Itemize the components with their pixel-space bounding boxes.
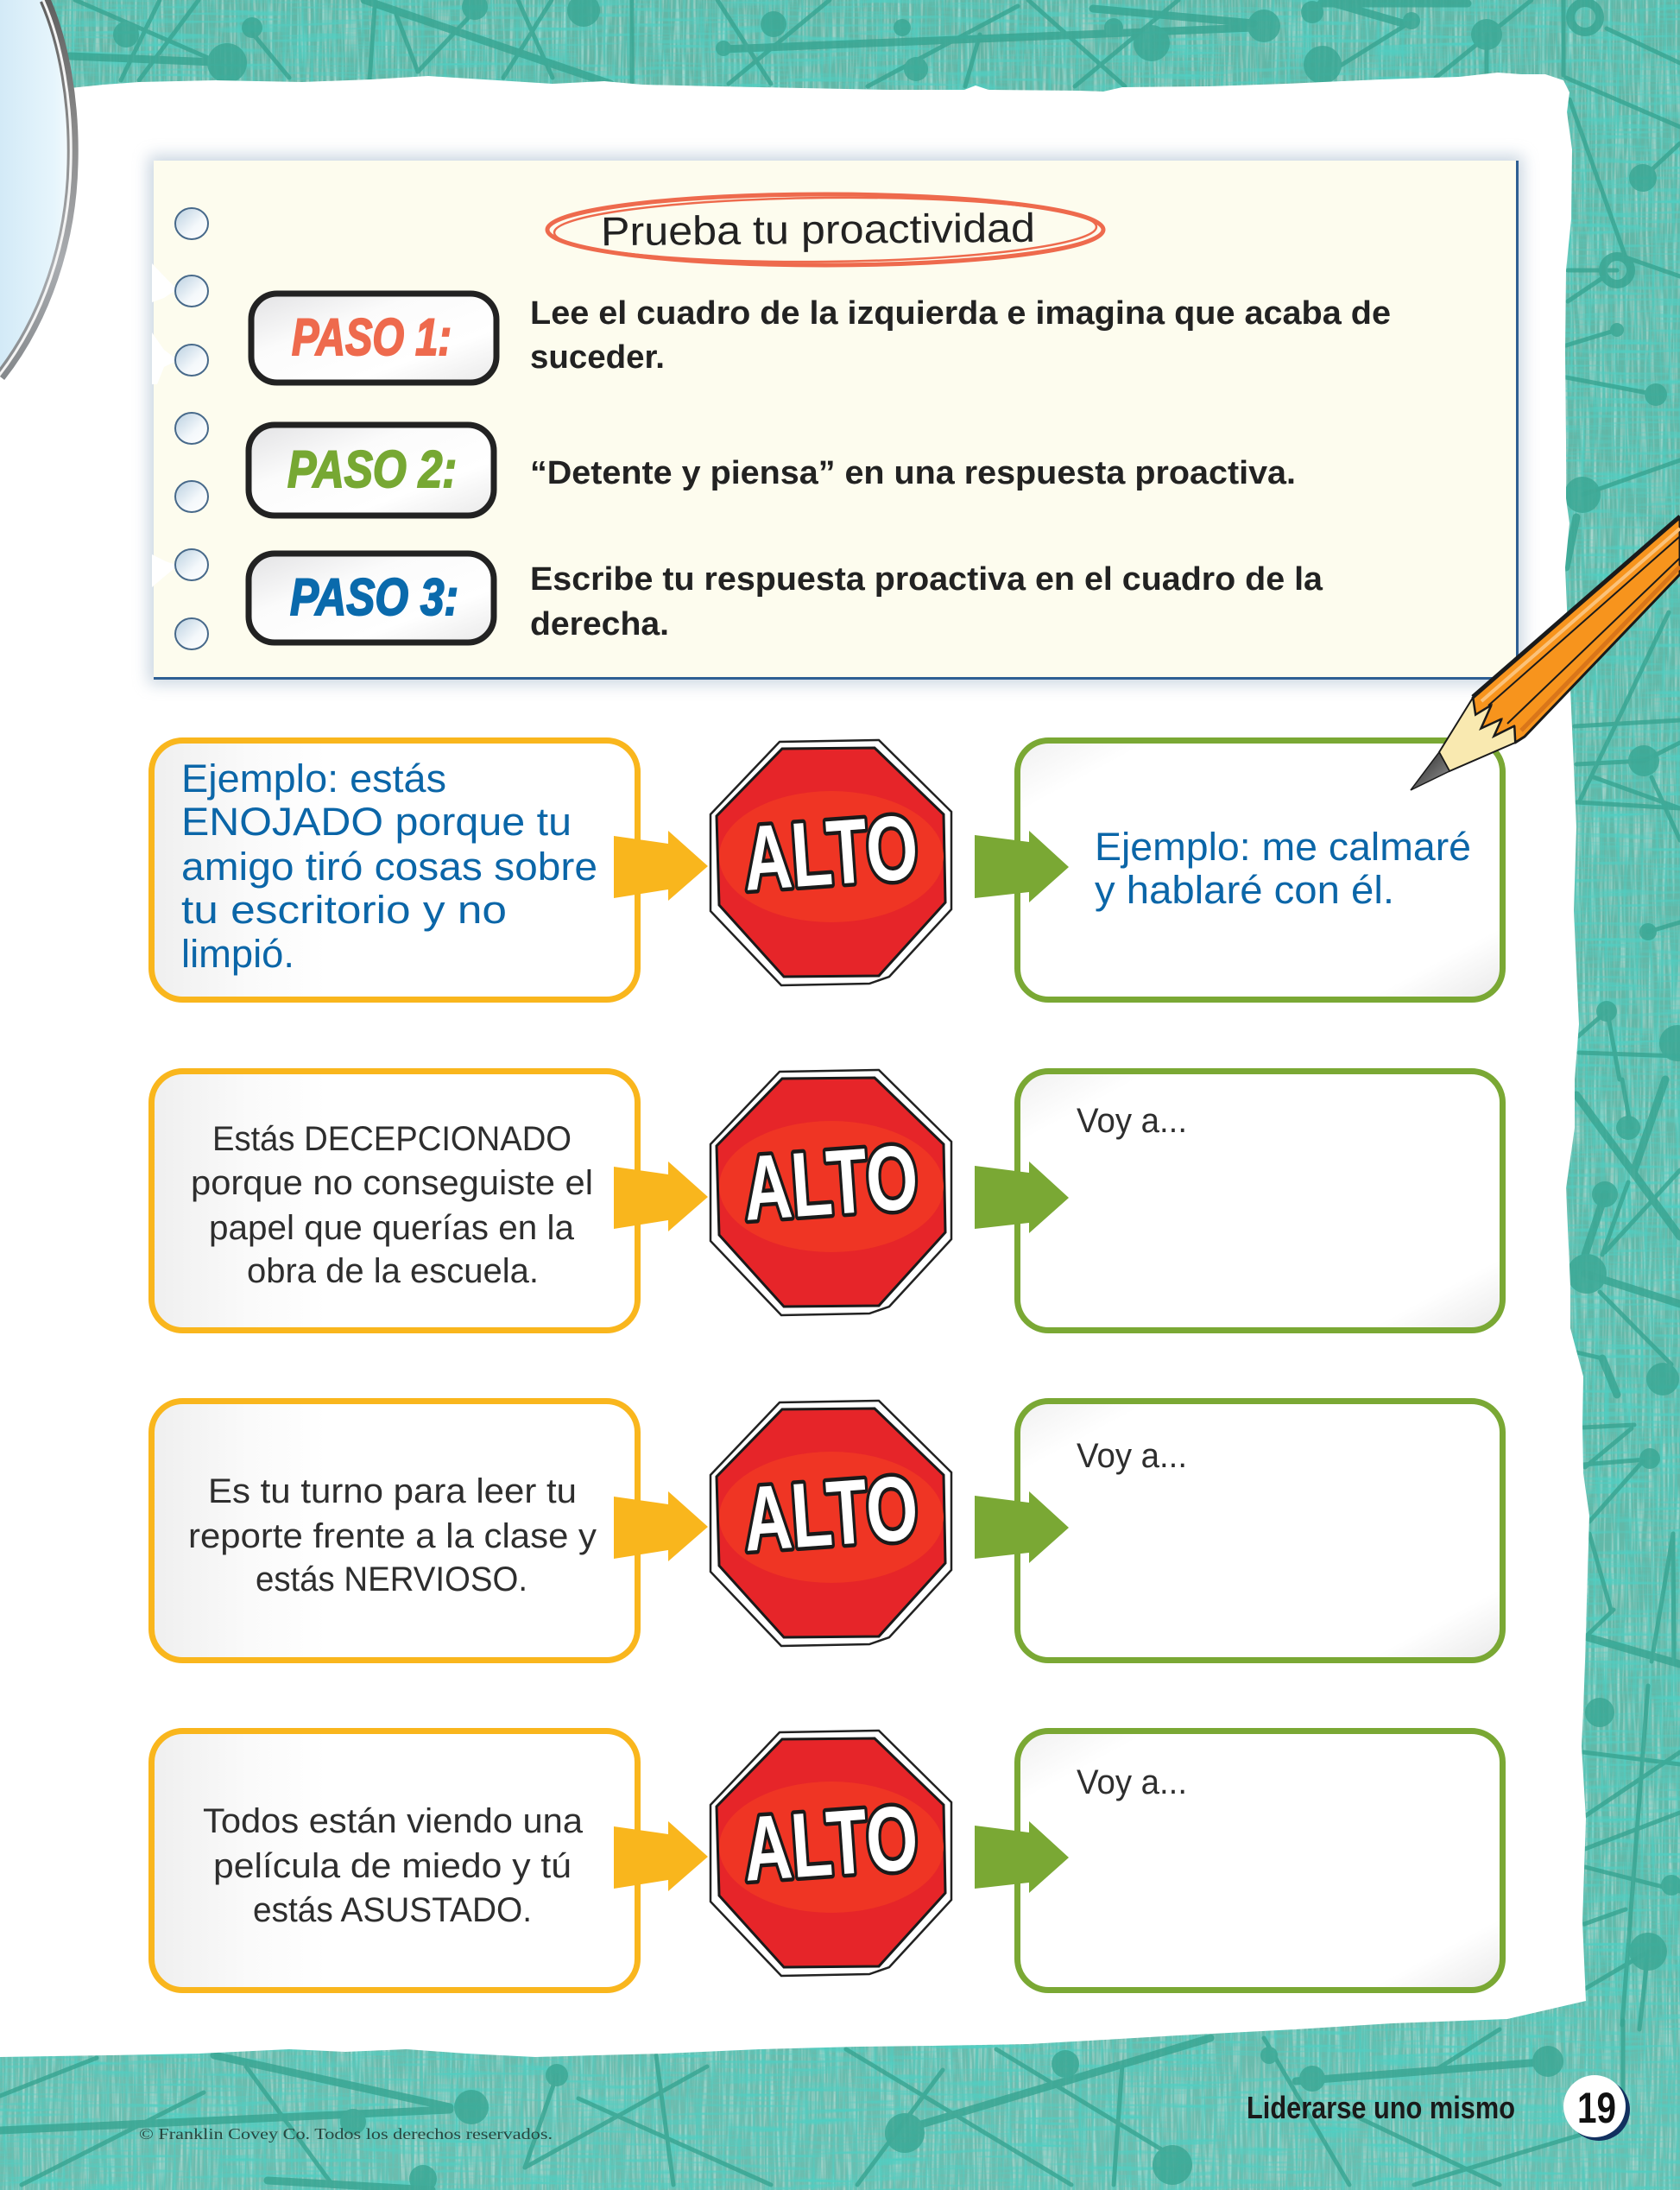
arrow: yellow 4 xyxy=(614,1821,708,1891)
situation box 1: tu escritorio y no xyxy=(181,888,507,932)
arrow: green 1 xyxy=(975,831,1069,902)
situation box 3: reporte frente a la clase y xyxy=(188,1517,597,1555)
response box 2: Voy a... xyxy=(1077,1102,1187,1140)
response box 4: Voy a... xyxy=(1077,1763,1187,1801)
title with hand-drawn oval: Prueba tu proactividad xyxy=(601,205,1035,254)
title with hand-drawn oval xyxy=(547,194,1103,265)
arrow: green 4 xyxy=(975,1821,1069,1893)
panel: notebook paper xyxy=(148,155,1523,684)
situation box 2: Estás DECEPCIONADO xyxy=(212,1120,572,1158)
response box 1: y hablaré con él. xyxy=(1095,868,1394,912)
situation box 1 xyxy=(152,741,637,1000)
situation box 4: estás ASUSTADO. xyxy=(253,1891,532,1929)
torn edges and binder holes xyxy=(152,208,208,649)
response box 4 xyxy=(1017,1731,1502,1990)
footer: copyright: © Franklin Covey Co. Todos los derechos reservados. xyxy=(139,2125,553,2143)
arrow: yellow 1 xyxy=(614,831,708,901)
response box 1: Ejemplo: me calmaré xyxy=(1095,825,1471,869)
row 4: scared xyxy=(152,1731,1502,1990)
footer: page number badge: 19 xyxy=(1577,2084,1616,2132)
situation box 2: obra de la escuela. xyxy=(247,1252,539,1290)
icon: stop sign 3 xyxy=(711,1401,951,1646)
situation box 4 xyxy=(152,1731,637,1990)
situation box 1: limpió. xyxy=(181,932,294,976)
row 2: disappointed xyxy=(152,1070,1502,1330)
row 1: example xyxy=(152,740,1502,1000)
situation box 2: porque no conseguiste el xyxy=(191,1164,593,1202)
network pattern: right band xyxy=(1564,99,1680,2029)
step 3: derecha. xyxy=(530,606,669,642)
situation box 4: Todos están viendo una xyxy=(203,1802,584,1840)
situation box 2: papel que querías en la xyxy=(209,1209,575,1247)
arrow: green 3 xyxy=(975,1491,1069,1563)
situation box 1: ENOJADO porque tu xyxy=(181,800,572,844)
response box 1 xyxy=(1017,741,1502,1000)
icon: stop sign 1: ALTO xyxy=(740,796,921,910)
magnifying glass xyxy=(0,0,73,377)
icon: stop sign 4 xyxy=(711,1731,951,1976)
step 2 xyxy=(249,425,1296,516)
icon: stop sign 2: ALTO xyxy=(740,1126,921,1240)
step 2: PASO 2: xyxy=(287,440,457,498)
situation box 3: Es tu turno para leer tu xyxy=(208,1472,577,1510)
icon: stop sign 4: ALTO xyxy=(740,1787,921,1901)
situation box 4: película de miedo y tú xyxy=(213,1847,572,1885)
icon: stop sign 1 xyxy=(711,740,951,985)
situation box 1: Ejemplo: estás xyxy=(181,756,446,801)
step 1: suceder. xyxy=(530,339,665,376)
step 3: PASO 3: xyxy=(290,568,458,626)
response box 2 xyxy=(1017,1071,1502,1330)
response box 3: Voy a... xyxy=(1077,1437,1187,1475)
step 1 xyxy=(251,294,1391,383)
step 3 xyxy=(249,554,1323,642)
arrow: green 2 xyxy=(975,1161,1069,1233)
response box 3 xyxy=(1017,1401,1502,1660)
step 1: Lee el cuadro de la izquierda e imagina que acaba de xyxy=(530,295,1391,332)
icon: stop sign 2 xyxy=(711,1070,951,1315)
icon: stop sign 3: ALTO xyxy=(740,1457,921,1571)
icon: pencil xyxy=(1411,516,1680,790)
situation box 1: amigo tiró cosas sobre xyxy=(181,845,597,889)
situation box 3 xyxy=(152,1401,637,1660)
row 3: nervous xyxy=(152,1401,1502,1660)
network pattern: top band xyxy=(70,0,1680,127)
step 3: Escribe tu respuesta proactiva en el cuadro de la xyxy=(530,561,1323,598)
footer: section title: Liderarse uno mismo xyxy=(1247,2090,1515,2125)
arrow: yellow 2 xyxy=(614,1161,708,1231)
situation box 2 xyxy=(152,1071,637,1330)
network pattern: bottom band xyxy=(0,2021,1623,2190)
footer: page number badge xyxy=(1563,2075,1630,2141)
step 2: “Detente y piensa” en una respuesta proactiva. xyxy=(530,455,1296,491)
situation box 3: estás NERVIOSO. xyxy=(256,1560,527,1598)
step 1: PASO 1: xyxy=(292,308,452,366)
arrow: yellow 3 xyxy=(614,1491,708,1561)
